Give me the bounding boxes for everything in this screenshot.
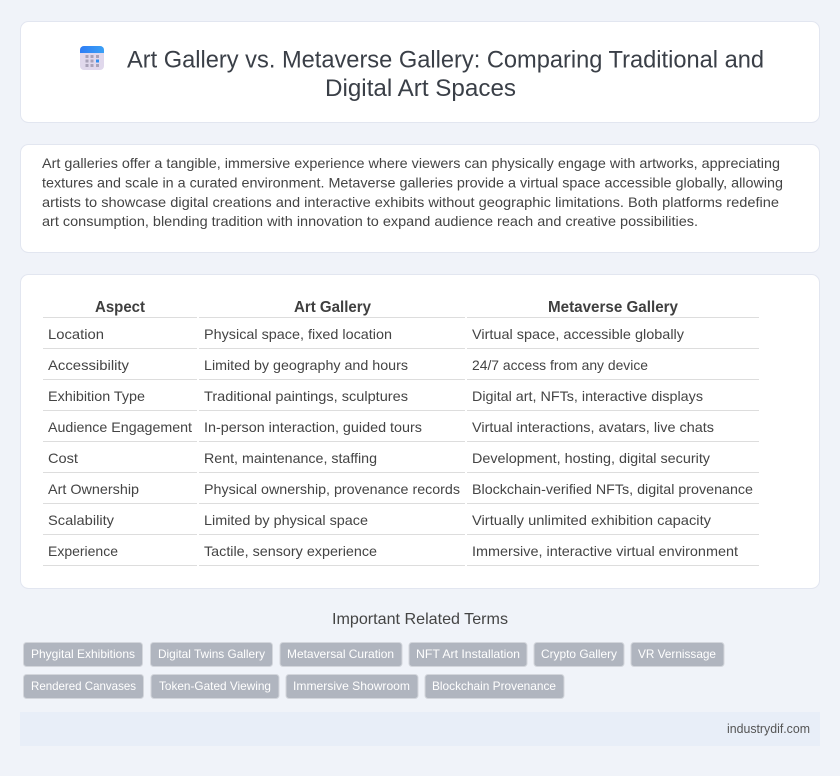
text block: intro: artists to showcase digital creations and interactive exhibits without geographic limitations. Both platforms redefine: [42, 194, 779, 210]
table row: Cost: Cost: [48, 450, 78, 466]
tag group: related terms: Digital Twins Gallery: [158, 647, 265, 661]
table row: Location: Physical space, fixed location: [204, 326, 392, 342]
text block: intro: [42, 155, 783, 229]
tag group: related terms: NFT Art Installation: [416, 647, 520, 661]
text block: intro: textures and scale in a curated environment. Metaverse galleries provide a virtual space accessible globally, allowing: [42, 174, 783, 190]
table row: Audience Engagement: [48, 419, 714, 435]
table row: Cost: Rent, maintenance, staffing: [204, 450, 377, 466]
tag group: related terms: Phygital Exhibitions: [31, 647, 135, 661]
text block: intro: art consumption, blending tradition with innovation to expand audience reach and creative possibilities.: [42, 213, 698, 229]
table row: Art Ownership: Blockchain-verified NFTs, digital provenance: [472, 481, 753, 497]
table row: Location: [48, 326, 684, 342]
table row: Accessibility: Accessibility: [48, 357, 129, 373]
table row: Accessibility: [48, 357, 648, 373]
table row: Exhibition Type: [48, 388, 703, 404]
tag group: related terms: Rendered Canvases: [31, 679, 136, 693]
table row: Exhibition Type: Traditional paintings, sculptures: [204, 388, 408, 404]
tag group: related terms: Blockchain Provenance: [432, 679, 556, 693]
table header row: Art Gallery: [294, 299, 371, 316]
title: Art Gallery vs. Metaverse Gallery: Comparing Traditional and: [127, 46, 764, 74]
table row: Accessibility: Limited by geography and hours: [204, 357, 408, 373]
table row: Scalability: [48, 512, 711, 528]
table row: Art Ownership: Art Ownership: [48, 481, 139, 497]
table row: Cost: Development, hosting, digital security: [472, 450, 710, 466]
footer bar: industrydif.com: [727, 722, 810, 736]
icon: calendar grid: [80, 46, 104, 70]
table header row: [95, 299, 678, 316]
title: Digital Art Spaces: [325, 75, 516, 102]
table row: Experience: Experience: [48, 543, 118, 559]
table row: Art Ownership: [48, 481, 753, 497]
title: [127, 46, 764, 102]
tag group: related terms: Immersive Showroom: [293, 679, 410, 693]
table row: Experience: Immersive, interactive virtual environment: [472, 543, 738, 559]
heading: related terms: Important Related Terms: [332, 611, 508, 628]
table row: Scalability: Scalability: [48, 512, 114, 528]
table row: Exhibition Type: Exhibition Type: [48, 388, 145, 404]
table row: Experience: Tactile, sensory experience: [204, 543, 377, 559]
table row: Audience Engagement: Audience Engagement: [48, 419, 192, 435]
panel: comparison table: [20, 274, 820, 588]
tag group: related terms: VR Vernissage: [638, 647, 716, 661]
tag group: related terms: Crypto Gallery: [541, 647, 617, 661]
table row: Audience Engagement: Virtual interactions, avatars, live chats: [472, 419, 714, 435]
tag group: related terms: Token-Gated Viewing: [159, 679, 271, 693]
table row: Location: Virtual space, accessible globally: [472, 326, 684, 342]
tag group: related terms: [24, 642, 724, 698]
table row: Location: Location: [48, 326, 104, 342]
table row: Experience: [48, 543, 738, 559]
table row: Art Ownership: Physical ownership, provenance records: [204, 481, 460, 497]
table row: Accessibility: 24/7 access from any device: [472, 357, 648, 373]
table row: Cost: [48, 450, 710, 466]
text block: intro: Art galleries offer a tangible, immersive experience where viewers can physically engage with artworks, appreciating: [42, 155, 780, 171]
panel: header: [20, 22, 820, 122]
table row: Exhibition Type: Digital art, NFTs, interactive displays: [472, 388, 703, 404]
table header row: Metaverse Gallery: [548, 299, 678, 316]
table header row: Aspect: [95, 299, 146, 316]
table row: Audience Engagement: In-person interaction, guided tours: [204, 419, 422, 435]
tag group: related terms: Metaversal Curation: [287, 647, 394, 661]
table row: Scalability: Virtually unlimited exhibition capacity: [472, 512, 711, 528]
footer bar: [20, 712, 820, 746]
table row: Scalability: Limited by physical space: [204, 512, 368, 528]
panel: intro paragraph: [20, 144, 820, 252]
